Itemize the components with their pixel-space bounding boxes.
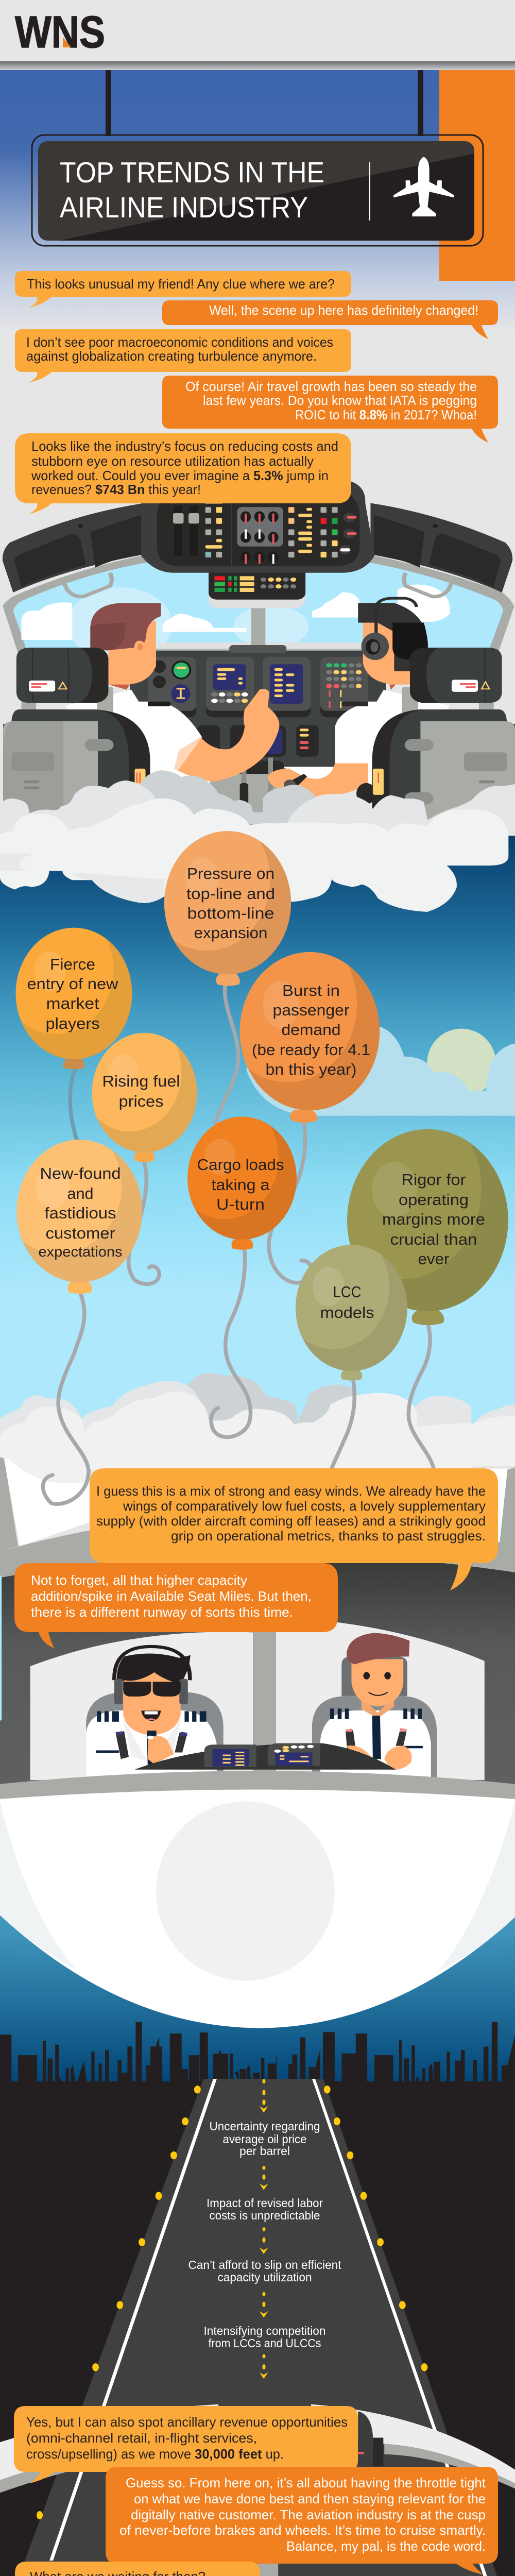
speech bubble 4: ROIC to hit 8.8% in 2017? Whoa!	[295, 407, 477, 422]
speech bubble 7	[14, 1563, 338, 1648]
balloon: New-found and fastidious customer expectations: and	[67, 1184, 94, 1202]
speech bubble 8: Yes, but I can also spot ancillary revenue opportunities	[26, 2414, 348, 2430]
speech bubble 8: cross/upselling) as we move 30,000 feet up.	[26, 2446, 284, 2462]
lower balloon clouds	[0, 1373, 515, 1483]
cockpit interior	[0, 1553, 515, 1785]
side window frames	[0, 1457, 18, 1551]
balloon: Burst in passenger demand: (be ready for 4.1	[252, 1041, 370, 1059]
thrust levers	[174, 757, 335, 832]
balloon: Burst in passenger demand: passenger	[273, 1001, 349, 1019]
city skyline	[0, 2022, 515, 2083]
speech bubble 1: This looks unusual my friend! Any clue where we are?	[27, 276, 335, 292]
title sign	[32, 70, 483, 246]
lower cockpit frame arc	[0, 1771, 515, 1811]
balloon: Rigor for operating margins: margins more	[382, 1210, 485, 1228]
cockpit front window surroundings	[0, 1457, 515, 1785]
speech bubble 10	[15, 2562, 260, 2576]
speech bubble 4: Of course! Air travel growth has been so steady the	[185, 379, 477, 394]
right pilot seat	[372, 648, 515, 832]
speech bubble 9	[106, 2467, 498, 2574]
pillar and sill	[0, 2563, 515, 2576]
logo: WNS: WNS	[15, 7, 105, 57]
bottom cockpit	[0, 2404, 515, 2576]
window sky and clouds	[13, 562, 503, 661]
balloon: Burst in passenger demand: demand	[281, 1021, 341, 1039]
balloon: New-found and fastidious customer expectations: New-found	[40, 1164, 121, 1182]
runway text: from LCCs and ULCCs	[208, 2336, 321, 2350]
speech bubble 9: on what we have done best and then staying relevant for the	[134, 2491, 486, 2506]
window frame	[0, 2404, 515, 2493]
balloon: New-found and fastidious customer expectations: customer	[45, 1224, 115, 1242]
background cloud behind burst balloon	[246, 1026, 515, 1116]
window frame	[3, 554, 514, 669]
pilot smiling	[312, 1633, 437, 1780]
runway	[0, 2079, 515, 2576]
speech bubble 6	[90, 1468, 498, 1590]
speech bubble 3: against globalization creating turbulence anymore.	[26, 348, 317, 364]
speech bubble 5: revenues? $743 Bn this year!	[31, 482, 201, 497]
left pilot	[66, 603, 279, 790]
header bar	[0, 0, 515, 70]
balloon: Fierce entry of new market players: entry of new	[27, 975, 118, 993]
speech bubble 6: I guess this is a mix of strong and easy winds. We already have the	[96, 1483, 486, 1499]
balloon: LCC models: models	[320, 1303, 374, 1321]
balloon: Fierce entry of new market players: market	[46, 994, 99, 1012]
balloon: Fierce entry of new market players: Fierce	[50, 955, 95, 973]
speech bubble 4	[162, 376, 498, 443]
speech bubble 7: there is a different runway of sorts this time.	[31, 1604, 293, 1620]
runway text	[188, 2120, 341, 2350]
balloon: Rigor for operating margins: ever	[418, 1250, 449, 1268]
balloon: Cargo loads taking a U-turn: taking a	[211, 1176, 270, 1194]
speech bubble 5: worked out. Could you ever imagine a 5.3% jump in	[31, 468, 329, 483]
balloon: Rising fuel prices	[92, 1032, 197, 1162]
window arch	[0, 1515, 515, 1578]
speech bubble 9: Balance, my pal, is the code word.	[286, 2538, 486, 2554]
balloon: Fierce entry of new market players: players	[45, 1014, 100, 1032]
cockpit rear view: top	[3, 480, 515, 832]
center lower switch box	[209, 568, 305, 608]
balloon: Cargo loads taking a U-turn: Cargo loads	[197, 1156, 284, 1174]
pilot with sunglasses	[86, 1647, 224, 1780]
windshield panes	[30, 1632, 253, 1780]
balloon: Cargo loads taking a U-turn	[187, 1117, 297, 1250]
runway text: costs is unpredictable	[209, 2209, 320, 2222]
speech bubble 3: I don’t see poor macroeconomic conditions and voices	[26, 334, 333, 350]
balloon strings	[43, 986, 434, 1504]
ceiling panels	[3, 503, 512, 597]
runway text: Uncertainty regarding	[209, 2120, 320, 2133]
balloon: New-found and fastidious customer expectations: fastidious	[44, 1204, 116, 1222]
ground	[0, 2081, 515, 2576]
left pilot seat	[3, 648, 150, 832]
balloon: Pressure on top-line and bottom-line expansion	[164, 831, 291, 986]
instrument dashboard	[130, 645, 386, 767]
title: AIRLINE INDUSTRY	[60, 191, 308, 224]
orange block	[439, 70, 515, 281]
cockpit clouds	[0, 770, 515, 912]
balloon: Rising fuel prices: prices	[118, 1092, 164, 1110]
speech bubble 6: supply (with older aircraft coming off leases) and a strikingly good	[96, 1513, 486, 1529]
balloon: Rising fuel prices: Rising fuel	[102, 1072, 180, 1090]
right pilot	[268, 598, 450, 804]
balloon: Cargo loads taking a U-turn: U-turn	[216, 1195, 265, 1213]
balloon: Rigor for operating margins: Rigor for	[402, 1171, 466, 1189]
runway text: average oil price	[222, 2132, 307, 2146]
speech bubble 4: last few years. Do you know that IATA is pegging	[203, 393, 477, 408]
speech bubble 8	[14, 2406, 358, 2483]
speech bubble 9: digitally native customer. The aviation industry is at the cusp	[131, 2507, 486, 2522]
aircraft nose	[0, 1801, 515, 2028]
speech bubble 2	[162, 300, 498, 339]
balloon: Rigor for operating margins: crucial than	[390, 1230, 477, 1248]
balloon: New-found and fastidious customer expectations: expectations	[38, 1244, 123, 1260]
balloon: Burst in passenger demand: bn this year)	[266, 1060, 356, 1078]
runway text: Intensifying competition	[204, 2324, 325, 2337]
balloon: Pressure on top-line and bottom-line expansion: bottom-line	[187, 904, 274, 922]
balloon: LCC models	[296, 1245, 407, 1381]
runway text: per barrel	[239, 2144, 290, 2158]
city sky	[0, 1896, 515, 2087]
balloon: Pressure on top-line and bottom-line expansion: top-line and	[186, 885, 275, 903]
balloon: Rigor for operating margins	[347, 1129, 508, 1325]
speech bubble 2: Well, the scene up here has definitely changed!	[209, 302, 478, 318]
title	[60, 156, 324, 224]
balloon sky background	[0, 836, 515, 1444]
blue sky background	[0, 70, 515, 333]
overhead panel	[141, 480, 374, 573]
runway lights	[92, 2086, 427, 2371]
balloon: Burst in passenger demand	[240, 952, 380, 1123]
balloon: Pressure on top-line and bottom-line expansion: expansion	[194, 924, 268, 942]
speech bubble 7: addition/spike in Available Seat Miles. But then,	[31, 1588, 312, 1604]
speech bubble 3	[15, 329, 351, 383]
speech bubble 8: (omni-channel retail, in-flight services,	[26, 2430, 257, 2446]
balloon: LCC models: LCC	[333, 1283, 362, 1301]
front instrument console	[134, 1743, 396, 1770]
balloon: New-found and fastidious customer expectations	[16, 1140, 142, 1294]
balloon: Burst in passenger demand: Burst in	[282, 981, 340, 999]
balloon: Fierce entry of new market players	[15, 927, 132, 1070]
balloon: Pressure on top-line and bottom-line expansion: Pressure on	[187, 865, 274, 883]
speech bubble 9: Guess so. From here on, it’s all about having the throttle tight	[126, 2475, 486, 2490]
speech bubble 9: of never-before brakes and wheels. It’s time to cruise smartly.	[119, 2522, 486, 2538]
runway text: capacity utilization	[217, 2270, 312, 2284]
speech bubble 1	[15, 271, 351, 308]
speech bubble 6: wings of comparatively low fuel costs, a lovely supplementary	[123, 1498, 486, 1514]
runway centre arrows	[260, 2079, 268, 2379]
speech bubble 5: Looks like the industry’s focus on reducing costs and	[31, 438, 338, 454]
speech bubble 5	[15, 433, 351, 514]
title: TOP TRENDS IN THE	[60, 156, 324, 189]
runway text: Impact of revised labor	[207, 2196, 323, 2210]
balloon: Rigor for operating margins: operating	[399, 1191, 469, 1209]
speech bubble 5: stubborn eye on resource utilization has actually	[31, 453, 314, 469]
speech bubble 6: grip on operational metrics, thanks to past struggles.	[171, 1528, 486, 1544]
runway text: Can’t afford to slip on efficient	[188, 2258, 341, 2272]
speech bubble 7: Not to forget, all that higher capacity	[31, 1572, 247, 1588]
balloons	[0, 809, 508, 1381]
icon: airplane	[393, 157, 454, 216]
